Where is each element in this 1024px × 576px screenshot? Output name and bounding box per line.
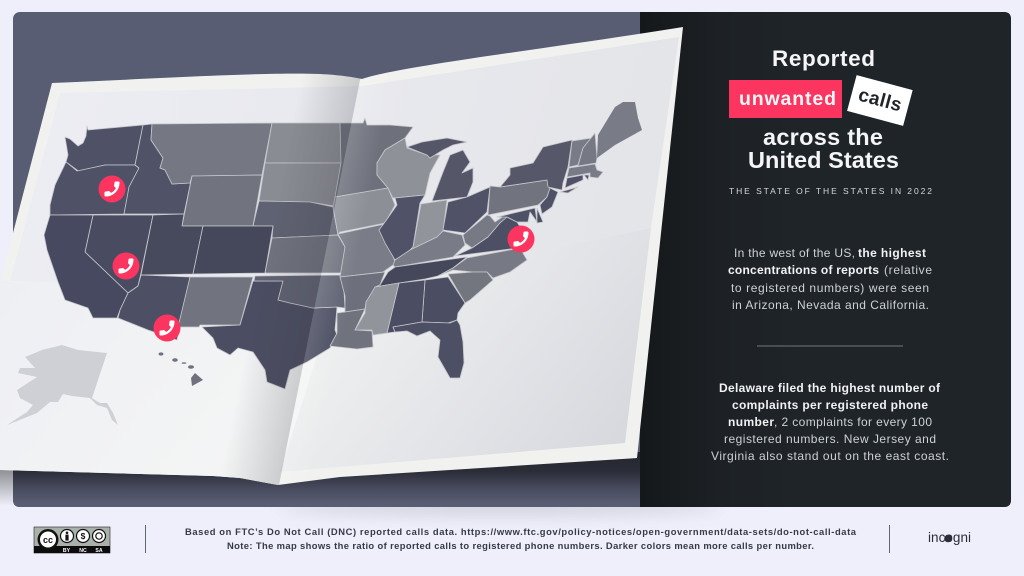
state: Kentucky [393,231,465,267]
paper fold shading [232,74,371,485]
text block: Delaware: Virginia also stand out on the east coast. [711,449,949,463]
state: South Carolina [448,272,493,303]
state: Michigan lower [432,150,473,201]
license badge: cc [43,535,53,545]
text block: west of the US: to registered numbers) were seen [731,281,929,295]
state: Rhode Island [584,175,589,180]
state: Washington [65,125,143,171]
title highlight: unwanted [729,80,842,118]
state: Virginia [455,217,530,256]
footer source note: Note: The map shows the ratio of reported calls to registered phone numbers. Darker colors mean more calls per number. [227,540,814,551]
state: North Carolina [438,248,527,278]
subtitle: THE STATE OF THE STATES IN 2022 [729,186,932,196]
title: United States [748,147,899,173]
state: Wyoming [182,175,262,226]
shadow at left edge below map [0,470,14,506]
state: Oklahoma [254,275,345,308]
text block: west of the US: the highest [858,246,926,260]
state: Colorado [193,226,273,274]
state: Tennessee [375,257,467,287]
title highlight: unwanted: unwanted [739,88,836,110]
footer source note [185,526,857,551]
state: Maryland [497,208,537,222]
state: Florida [393,320,464,378]
state: Alabama [387,280,425,333]
state: Minnesota [335,118,413,197]
license badge: $ [81,531,86,541]
title: Reported [772,46,875,71]
text block: west of the US: (relative [884,263,932,277]
state: Alaska [7,345,118,425]
text block: Delaware: , 2 complaints for every 100 [774,415,932,429]
panel: dark text side [640,12,1011,507]
state: Michigan upper [407,138,467,158]
state: Massachusetts [567,164,603,178]
state: Connecticut [565,175,583,188]
marker: Nevada phone [112,252,140,280]
license badge: BY [63,548,71,554]
state: Idaho [124,124,192,214]
state: Oregon [50,162,139,215]
state: Long Island [560,187,578,193]
license badge: SA [95,548,103,554]
text block: west of the US: in Arizona, Nevada and California. [732,298,929,312]
state: Wisconsin [377,138,440,198]
state: Ohio [443,187,490,233]
state: Utah [141,214,203,275]
state: Missouri [338,224,395,277]
state: Indiana [410,200,447,250]
state: Iowa [333,188,395,235]
state: Arizona [118,275,190,340]
footer source note: Based on FTC’s Do Not Call (DNC) reported calls data. https://www.ftc.gov/policy-notices/open-government/data-sets/do-not-call-data [185,526,857,537]
paper map sheet [0,27,683,485]
text block: west of the US [728,246,932,312]
state: New Jersey [540,188,558,214]
state: Kansas [265,235,345,273]
state: North Dakota [265,123,342,163]
marker: Arizona phone [154,314,180,342]
state: Vermont [569,138,592,167]
title tag: calls: calls [856,85,904,116]
state: Georgia [422,277,465,323]
state: Nevada [85,215,153,293]
state: Arkansas [340,272,385,312]
state: Montana [151,123,272,184]
license badge: NC [79,548,87,554]
marker: Virginia phone [508,226,534,252]
title: across the [763,124,883,150]
state: Mississippi [355,283,399,335]
license badge [34,527,110,554]
text block: Delaware [711,381,949,463]
state: New Hampshire [578,133,597,166]
title [729,46,913,173]
state: Maine [597,102,642,158]
state: Louisiana [330,309,373,349]
title tag: calls [847,75,913,126]
text block: west of the US: In the west of the US, [734,246,855,260]
text block: Delaware: Delaware filed the highest number of [719,381,941,395]
state: Hawaii [158,352,203,386]
state: Pennsylvania [488,180,550,215]
state: New Mexico [178,277,253,327]
state: Delaware [537,208,543,223]
shadow beneath map [13,452,640,507]
state: Nebraska [253,201,338,238]
choropleth map of the United States [7,102,642,425]
text block: Delaware: registered numbers. New Jersey and [724,432,936,446]
text block: Delaware: complaints per registered phone [732,398,928,412]
soft shadow under panel [294,507,706,520]
state: Texas [202,281,337,389]
state: Illinois [379,195,425,260]
text block: Delaware: number [728,415,774,429]
logo: incogni: incogni [928,530,971,545]
text block: west of the US: concentrations of reports [728,263,879,277]
state: California [44,215,128,318]
state: West Virginia [463,215,510,248]
state: South Dakota [259,163,341,206]
state: New York [500,140,572,190]
marker: Oregon phone [98,176,126,202]
